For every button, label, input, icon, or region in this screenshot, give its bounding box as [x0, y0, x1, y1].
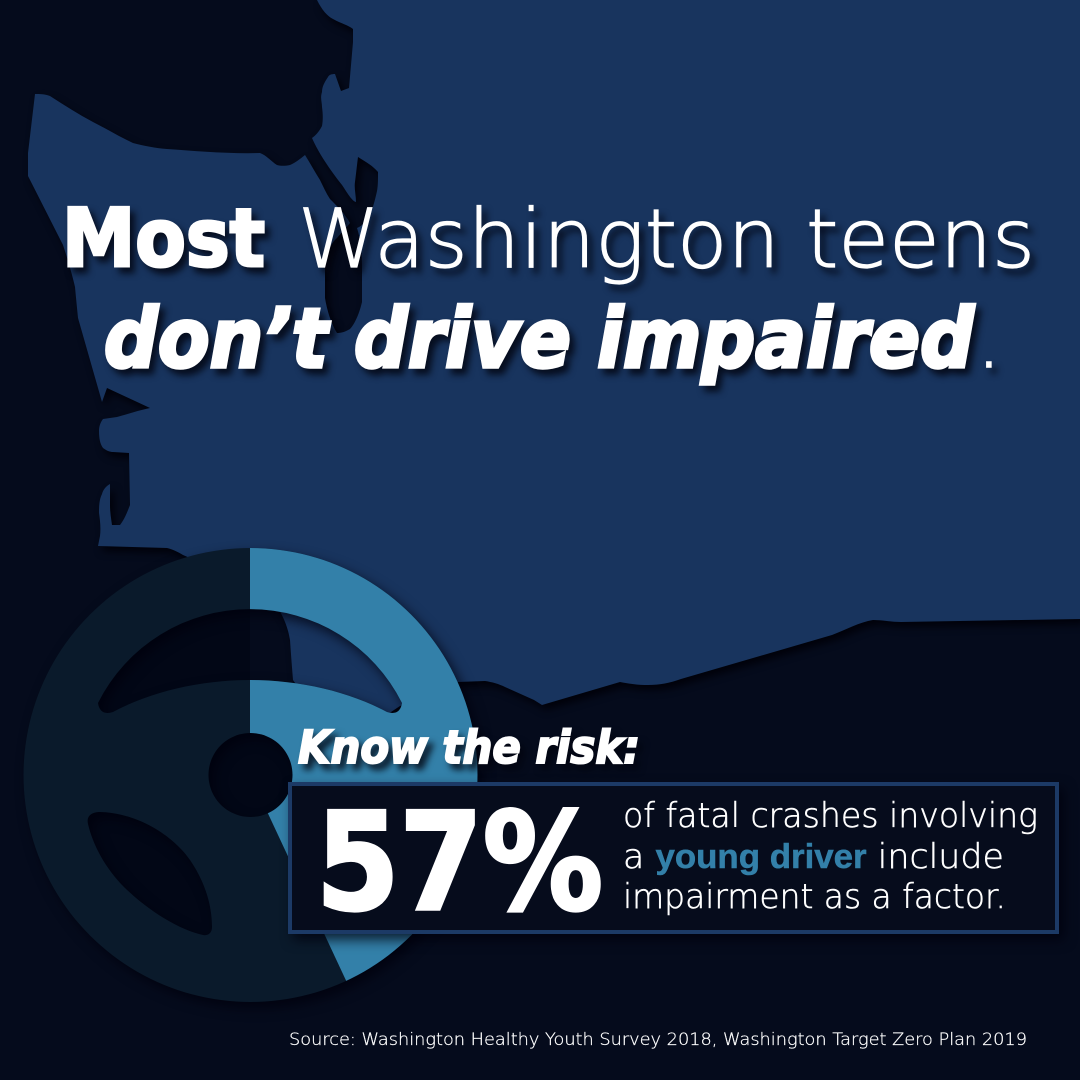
map: Washington state silhouette: [28, 0, 1080, 760]
title line 2: don’t drive impaired: [104, 292, 975, 387]
source note: Source: Washington Healthy Youth Survey 2018, Washington Target Zero Plan 2019: [289, 1030, 1027, 1050]
callout panel: [290, 784, 1057, 932]
wheel openings seen through: hub and lower-left window: [88, 605, 293, 935]
statistic description: a young driver include: [623, 837, 1004, 877]
title line 2: .: [976, 293, 1002, 387]
statistic: 57%: 57%: [316, 784, 603, 941]
steering wheel: [24, 548, 478, 1002]
title line 1: Most: [62, 192, 265, 285]
statistic description: impairment as a factor.: [623, 877, 1006, 917]
title: [62, 192, 1035, 387]
statistic description: of fatal crashes involving: [623, 796, 1038, 836]
statistic description: [623, 796, 1038, 917]
subheading: know the risk: Know the risk:: [298, 721, 640, 774]
wheel highlighted portion: 43%: [250, 548, 478, 981]
wheel rim and spokes: [24, 548, 478, 1002]
callout box: [290, 784, 1057, 941]
wheel dark portion: 57%: [24, 548, 478, 1002]
title line 1: Washington teens: [298, 193, 1035, 287]
